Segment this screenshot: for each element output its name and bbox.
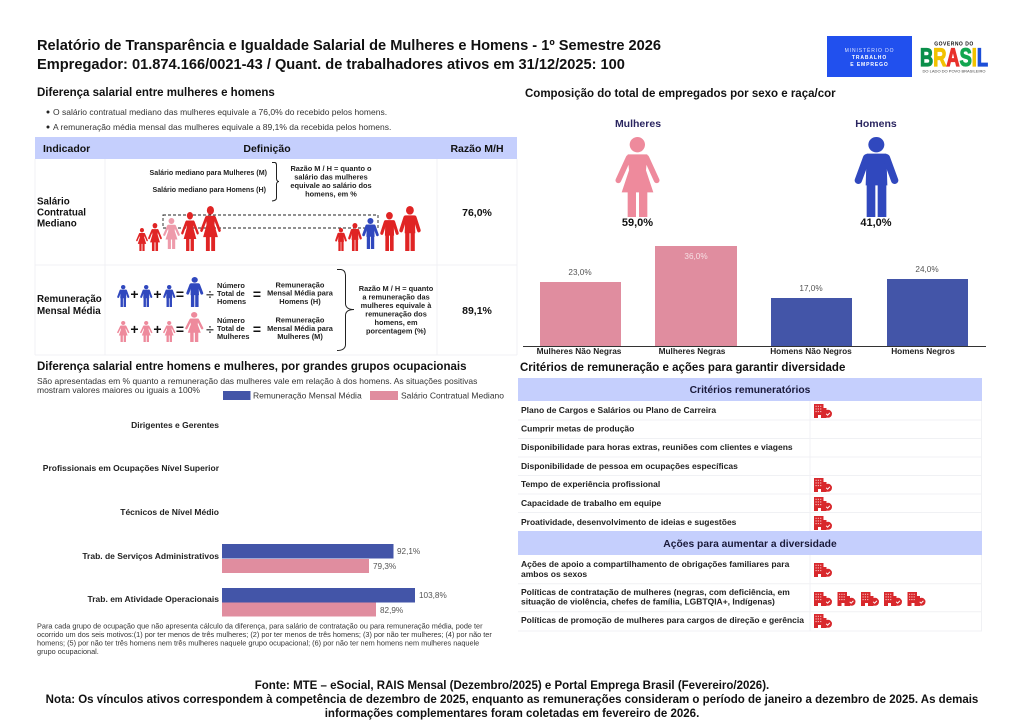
- title: Relatório de Transparência e Igualdade Salarial de Mulheres e Homens - 1º Semestre 2026: [37, 38, 661, 54]
- panel: tabela de indicadores: Homens: [217, 297, 246, 306]
- panel: tabela de indicadores: Razão M / H = quanto o: [290, 164, 372, 173]
- panel: tabela de indicadores: +: [130, 286, 139, 302]
- panel: tabela de indicadores: salário das mulheres: [294, 172, 368, 182]
- panel: critérios e ações: [518, 378, 982, 631]
- panel: tabela de indicadores: Total de: [217, 289, 245, 298]
- panel: critérios e ações: Ações para aumentar a diversidade: [663, 539, 837, 550]
- nota de rodapé do gráfico: Para cada grupo de ocupação que não apresenta cálculo da diferença, para salário de contratação ou para remuneração média, pode ter: [37, 622, 483, 630]
- panel: tabela de indicadores: +: [153, 286, 162, 302]
- panel: tabela de indicadores: remuneração dos: [365, 310, 427, 318]
- bar chart: sexo e raça/cor: Mulheres Negras: [659, 346, 726, 356]
- panel: tabela de indicadores: =: [253, 321, 261, 337]
- panel: critérios e ações: Critérios remuneratórios: [690, 385, 811, 396]
- panel: critérios e ações: situação de violência, chefes de família, LGBTQIA+, Indígenas): [521, 596, 775, 606]
- resumo em tópicos: O salário contratual mediano das mulheres equivale a 76,0% do recebido pelos homens.: [53, 107, 387, 117]
- icon: mulheres 59%: Mulheres: [615, 118, 661, 130]
- legend: Remuneração Mensal Média: [253, 390, 362, 400]
- panel: tabela de indicadores: Salário mediano para Mulheres (M): [150, 169, 268, 177]
- bar chart: sexo e raça/cor: [523, 246, 986, 356]
- panel: tabela de indicadores: 89,1%: [462, 305, 493, 317]
- panel: critérios e ações: Disponibilidade de pessoa em ocupações específicas: [521, 461, 738, 471]
- panel: tabela de indicadores: Remuneração: [276, 316, 325, 324]
- heading: grupos ocupacionais: Diferença salarial entre homens e mulheres, por grandes grupos ocupacionais: [37, 361, 466, 373]
- panel: tabela de indicadores: equivale ao salário dos: [290, 181, 372, 190]
- bar chart: grupos ocupacionais: 103,8%: [419, 591, 447, 600]
- panel: tabela de indicadores: Mediano: [37, 218, 77, 230]
- panel: tabela de indicadores: Contratual: [37, 208, 86, 218]
- panel: tabela de indicadores: Número: [217, 316, 245, 325]
- panel: tabela de indicadores: homens, em %: [305, 190, 357, 198]
- panel: tabela de indicadores: +: [130, 321, 139, 337]
- bar chart: sexo e raça/cor: Homens Não Negros: [770, 346, 852, 356]
- panel: critérios e ações: Disponibilidade para horas extras, reuniões com clientes e viagens: [521, 442, 793, 452]
- texto explicativo: São apresentadas em % quanto a remuneração das mulheres vale em relação à dos homens. As situações positivas: [37, 376, 477, 386]
- bar chart: grupos ocupacionais: Trab. de Serviços Administrativos: [82, 551, 219, 561]
- footer: fonte e nota: Fonte: MTE – eSocial, RAIS Mensal (Dezembro/2025) e Portal Emprega Brasil (Fevereiro/2026).: [255, 680, 769, 692]
- panel: critérios e ações: Cumprir metas de produção: [521, 424, 634, 434]
- panel: tabela de indicadores: Total de: [217, 324, 245, 333]
- resumo em tópicos: A remuneração média mensal das mulheres equivale a 89,1% da recebida pelos homens.: [53, 122, 391, 132]
- panel: tabela de indicadores: Indicador: [43, 143, 90, 155]
- bar chart: sexo e raça/cor: 36,0%: [684, 252, 708, 261]
- bar chart: sexo e raça/cor: 17,0%: [799, 284, 823, 293]
- texto explicativo: mostram valores maiores ou iguais a 100%: [37, 385, 200, 395]
- title: Empregador: 01.874.166/0021-43 / Quant. de trabalhadores ativos em 31/12/2025: 100: [37, 57, 625, 73]
- logo: ministério e governo: GOVERNO DO: [934, 42, 974, 48]
- panel: tabela de indicadores: Mensal Média para: [267, 324, 334, 333]
- bar chart: grupos ocupacionais: Técnicos de Nível Médio: [120, 507, 219, 517]
- panel: tabela de indicadores: =: [253, 286, 261, 302]
- panel: critérios e ações: Capacidade de trabalho em equipe: [521, 498, 662, 508]
- panel: tabela de indicadores: ÷: [206, 286, 214, 302]
- heading: critérios: Critérios de remuneração e ações para garantir diversidade: [520, 362, 845, 374]
- panel: critérios e ações: Ações de apoio a compartilhamento de obrigações familiares para: [521, 559, 790, 569]
- logo: ministério e governo: TRABALHO: [852, 55, 887, 61]
- texto explicativo: [37, 376, 477, 395]
- legend: [223, 390, 504, 400]
- icon: homens 41%: Homens: [855, 118, 897, 130]
- panel: tabela de indicadores: Mensal Média: [37, 306, 101, 317]
- logo: ministério e governo: DO LADO DO POVO BRASILEIRO: [923, 68, 985, 74]
- logo: ministério e governo: [827, 36, 988, 77]
- nota de rodapé do gráfico: ocorrido um dos seis motivos:(1) por ter menos de três mulheres; (2) por ter menos de três homens; (3) por não ter mulheres; (4) por não ter: [37, 630, 492, 639]
- bar chart: sexo e raça/cor: 24,0%: [915, 265, 939, 274]
- logo: ministério e governo: BRASIL: [920, 44, 988, 72]
- bar chart: grupos ocupacionais: Trab. em Atividade Operacionais: [88, 594, 219, 604]
- panel: tabela de indicadores: a remuneração das: [362, 292, 430, 302]
- heading: composição: Composição do total de empregados por sexo e raça/cor: [525, 88, 836, 100]
- panel: tabela de indicadores: homens, em: [374, 318, 418, 327]
- panel: tabela de indicadores: porcentagem (%): [366, 326, 427, 336]
- bar chart: sexo e raça/cor: 23,0%: [568, 268, 592, 277]
- panel: tabela de indicadores: Definição: [243, 143, 291, 155]
- footer: fonte e nota: [46, 680, 978, 720]
- footer: fonte e nota: Nota: Os vínculos ativos correspondem à competência de dezembro de 2025, enquanto as remunerações consideram o período de janeiro a dezembro de 2025. As demais: [46, 694, 978, 706]
- nota de rodapé do gráfico: homens; (5) por não ter três homens nem três mulheres naquele grupo ocupacional; (6) por não ter nem homens nem mulheres naquele: [37, 638, 479, 648]
- nota de rodapé do gráfico: grupo ocupacional.: [37, 647, 99, 656]
- bar chart: sexo e raça/cor: Homens Negros: [891, 346, 955, 356]
- panel: tabela de indicadores: mulheres equivale à: [361, 301, 432, 310]
- heading: diferença salarial: Diferença salarial entre mulheres e homens: [37, 87, 275, 99]
- panel: tabela de indicadores: Mensal Média para: [267, 288, 334, 298]
- panel: tabela de indicadores: [35, 137, 517, 355]
- legend: Salário Contratual Mediano: [401, 390, 504, 400]
- panel: tabela de indicadores: Número: [217, 281, 245, 290]
- panel: tabela de indicadores: 76,0%: [462, 207, 493, 219]
- panel: tabela de indicadores: Razão M / H = quanto: [359, 284, 434, 293]
- bar chart: grupos ocupacionais: 79,3%: [373, 562, 396, 571]
- panel: tabela de indicadores: Mulheres: [217, 332, 249, 341]
- panel: critérios e ações: Plano de Cargos e Salários ou Plano de Carreira: [521, 405, 716, 415]
- panel: tabela de indicadores: +: [153, 321, 162, 337]
- icon: mulheres 59%: [615, 118, 661, 229]
- panel: tabela de indicadores: ÷: [206, 321, 214, 337]
- panel: critérios e ações: Políticas de contratação de mulheres (negras, com deficiência, em: [521, 587, 790, 597]
- panel: tabela de indicadores: Salário: [37, 196, 70, 208]
- title: [37, 38, 661, 73]
- panel: critérios e ações: ambos os sexos: [521, 569, 587, 579]
- panel: tabela de indicadores: Salário mediano para Homens (H): [152, 186, 267, 194]
- bar chart: grupos ocupacionais: Profissionais em Ocupações Nível Superior: [43, 463, 220, 473]
- nota de rodapé do gráfico: [37, 622, 492, 656]
- panel: tabela de indicadores: Razão M/H: [450, 143, 504, 155]
- panel: tabela de indicadores: Remuneração: [37, 294, 102, 305]
- bar chart: grupos ocupacionais: [43, 420, 447, 616]
- icon: mulheres 59%: 59,0%: [622, 217, 653, 229]
- resumo em tópicos: [46, 107, 391, 132]
- panel: tabela de indicadores: Mulheres (M): [277, 332, 323, 341]
- footer: fonte e nota: informações complementares foram coletadas em fevereiro de 2026.: [325, 708, 699, 720]
- panel: tabela de indicadores: Homens (H): [279, 297, 321, 306]
- bar chart: grupos ocupacionais: 92,1%: [397, 547, 420, 556]
- icon: homens 41%: 41,0%: [860, 217, 892, 229]
- panel: tabela de indicadores: =: [176, 286, 184, 302]
- panel: tabela de indicadores: =: [176, 321, 184, 337]
- logo: ministério e governo: E EMPREGO: [850, 62, 889, 68]
- bar chart: grupos ocupacionais: 82,9%: [380, 606, 403, 615]
- panel: tabela de indicadores: Remuneração: [276, 280, 325, 290]
- bar chart: grupos ocupacionais: Dirigentes e Gerentes: [131, 420, 219, 430]
- bar chart: sexo e raça/cor: Mulheres Não Negras: [537, 346, 622, 356]
- panel: critérios e ações: Políticas de promoção de mulheres para cargos de direção e gerência: [521, 615, 804, 625]
- logo: ministério e governo: MINISTÉRIO DO: [845, 47, 894, 54]
- panel: critérios e ações: Tempo de experiência profissional: [521, 479, 660, 489]
- panel: critérios e ações: Proatividade, desenvolvimento de ideias e sugestões: [521, 517, 737, 527]
- icon: homens 41%: [855, 118, 897, 229]
